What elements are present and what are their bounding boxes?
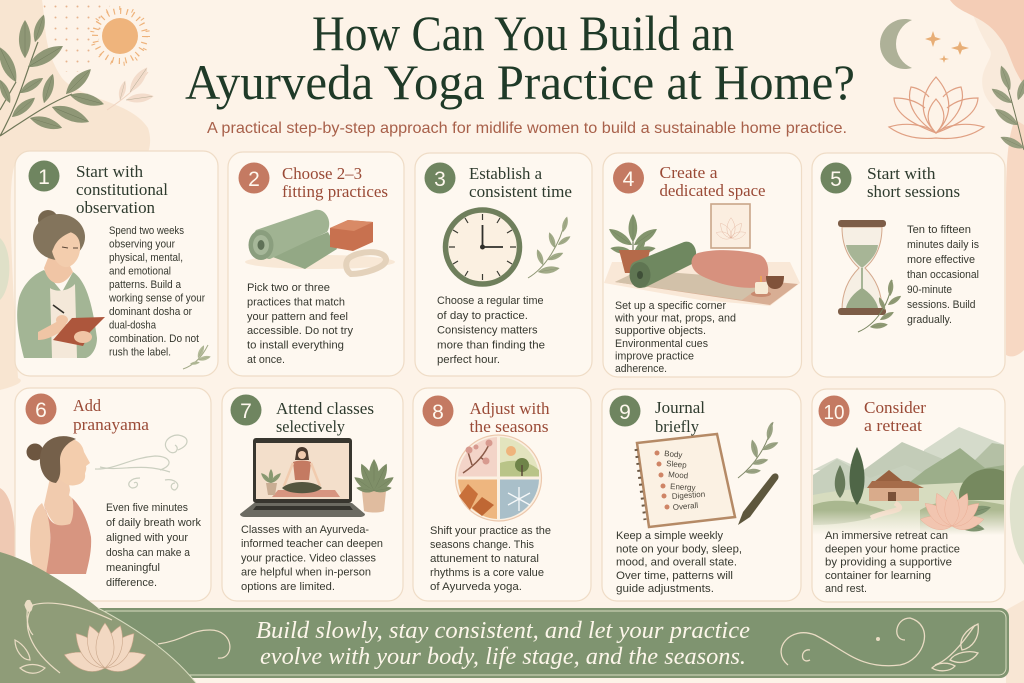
text 1: rush the label. xyxy=(109,346,171,358)
heading 8: Adjust with xyxy=(470,399,550,418)
panel: step 9 xyxy=(602,389,801,601)
text 8: rhythms is a core value xyxy=(430,567,544,579)
banner text xyxy=(256,618,750,670)
number badge 10 xyxy=(818,396,850,426)
text 8: seasons change. This xyxy=(430,539,534,551)
text 1: combination. Do not xyxy=(109,333,199,345)
illustration: journal notebook: Digestion xyxy=(672,490,705,501)
heading 3: Establish a xyxy=(469,164,543,183)
text 5: more effective xyxy=(907,254,975,266)
text 3: of day to practice. xyxy=(437,310,528,322)
icon: dotted halo xyxy=(42,0,112,72)
number badge 9 xyxy=(610,396,640,426)
number badge 2: 2 xyxy=(248,168,260,191)
heading 10: Consider xyxy=(864,398,927,417)
panel: step 2 xyxy=(228,152,404,376)
heading 9 xyxy=(655,398,705,436)
text 1: physical, mental, xyxy=(109,252,183,264)
heading 5: short sessions xyxy=(867,182,960,201)
number badge 1 xyxy=(28,160,60,192)
title xyxy=(185,5,855,110)
text 1: dual-dosha xyxy=(109,320,157,332)
icon: sprig xyxy=(858,279,902,332)
text 1 xyxy=(108,225,205,358)
text 5: gradually. xyxy=(907,314,952,326)
text 5: 90-minute xyxy=(907,284,952,296)
text 6: difference. xyxy=(106,577,157,589)
illustration: journal notebook: Mood xyxy=(668,470,688,480)
panel: step 1 xyxy=(15,151,218,376)
illustration: clock xyxy=(446,210,520,284)
text 3: more than finding the xyxy=(437,339,545,351)
number badge 6: 6 xyxy=(35,399,47,422)
heading 2: Choose 2–3 xyxy=(282,164,362,183)
illustration: laptop class xyxy=(240,438,365,517)
number badge 1: 1 xyxy=(38,166,50,189)
text 3 xyxy=(437,295,545,366)
text 5: than occasional xyxy=(907,269,979,281)
heading 9: briefly xyxy=(655,417,700,436)
text 7 xyxy=(241,524,383,593)
text 6: aligned with your xyxy=(106,532,188,544)
text 4: Environmental cues xyxy=(615,338,708,350)
illustration: practice corner xyxy=(604,204,800,306)
heading 6: pranayama xyxy=(73,415,150,434)
heading 1: Start with xyxy=(76,162,144,181)
text 9: Keep a simple weekly xyxy=(616,530,723,542)
text 5 xyxy=(907,224,979,326)
text 2 xyxy=(247,282,354,366)
icon: breath swirl xyxy=(95,435,187,490)
icon: small sprig xyxy=(183,344,211,369)
heading 7: Attend classes xyxy=(276,399,374,418)
heading 5 xyxy=(867,164,960,201)
closing banner xyxy=(0,552,1009,683)
panel: step 8 xyxy=(413,388,591,601)
text 2: your pattern and feel xyxy=(247,311,348,323)
text 1: Spend two weeks xyxy=(109,225,184,237)
heading 3 xyxy=(469,164,572,201)
heading 2 xyxy=(282,164,388,201)
text 9: guide adjustments. xyxy=(616,583,714,595)
illustration: woman breathing xyxy=(26,436,91,574)
icon: banner lotus xyxy=(62,623,148,676)
text 8: Shift your practice as the xyxy=(430,525,551,537)
number badge 8: 8 xyxy=(432,401,444,424)
icon: potted plant xyxy=(352,459,396,512)
panel: step 5 xyxy=(812,153,1005,377)
text 5: sessions. Build xyxy=(907,299,976,311)
text 6: dosha can make a xyxy=(106,547,191,559)
illustration: journal notebook: Energy xyxy=(670,482,696,492)
number badge 7: 7 xyxy=(240,400,252,423)
number badge 8 xyxy=(422,396,454,426)
text 9 xyxy=(616,530,742,595)
icon: olive branch top right xyxy=(989,64,1024,152)
text 1: and emotional xyxy=(109,266,171,278)
heading 4: dedicated space xyxy=(660,181,766,200)
text 4: with your mat, props, and xyxy=(614,313,736,325)
heading 10 xyxy=(864,398,927,435)
text 1: working sense of your xyxy=(108,292,205,304)
number badge 6 xyxy=(26,394,56,424)
text 6: of daily breath work xyxy=(106,517,201,529)
text 10: by providing a supportive xyxy=(825,557,952,569)
text 1: patterns. Build a xyxy=(109,279,182,291)
text 3: Consistency matters xyxy=(437,325,538,337)
text 6: meaningful xyxy=(106,562,160,574)
text 10: and rest. xyxy=(825,583,867,595)
heading 5: Start with xyxy=(867,164,936,183)
icon: stars xyxy=(925,31,969,63)
heading 7: selectively xyxy=(276,417,346,436)
illustration: mat, block and strap xyxy=(245,210,395,274)
text 7: your practice. Video classes xyxy=(241,552,376,564)
number badge 5: 5 xyxy=(830,168,842,191)
number badge 5 xyxy=(820,162,852,194)
illustration: journal notebook: Body xyxy=(664,449,683,460)
text 2: practices that match xyxy=(247,296,345,308)
icon: framed lotus xyxy=(711,204,750,248)
banner text: Build slowly, stay consistent, and let your practice xyxy=(256,618,750,644)
heading 10: a retreat xyxy=(864,416,922,435)
text 1: observing your xyxy=(109,238,175,250)
title: How Can You Build an xyxy=(312,5,734,61)
heading 9: Journal xyxy=(655,398,705,417)
text 4: improve practice xyxy=(615,350,694,362)
text 7: options are limited. xyxy=(241,581,335,593)
icon: pink lotus xyxy=(919,490,992,534)
heading 8 xyxy=(470,399,550,436)
number badge 3 xyxy=(424,162,456,194)
icon: sprig and pen xyxy=(738,422,779,525)
panel: step 6 xyxy=(15,388,211,601)
heading 7 xyxy=(276,399,374,436)
decorative vine left xyxy=(15,600,230,673)
text 4: supportive objects. xyxy=(615,325,706,337)
text 3: Choose a regular time xyxy=(437,295,544,307)
text 10 xyxy=(825,530,960,595)
illustration: woman journaling xyxy=(17,210,105,358)
text 9: mood, and overall state. xyxy=(616,557,737,569)
illustration: four seasons wheel xyxy=(456,435,542,521)
text 4: Set up a specific corner xyxy=(615,300,726,312)
text 4 xyxy=(614,300,736,375)
text 10: deepen your home practice xyxy=(825,543,960,555)
text 2: Pick two or three xyxy=(247,282,330,294)
heading 6 xyxy=(73,396,150,434)
text 10: container for learning xyxy=(825,570,931,582)
icon: crescent moon xyxy=(880,19,912,69)
illustration: journal notebook xyxy=(636,434,735,527)
heading 6: Add xyxy=(73,396,102,415)
text 9: Over time, patterns will xyxy=(616,570,733,582)
heading 1: observation xyxy=(76,198,155,217)
icon: faint sprig xyxy=(107,65,154,110)
icon: olive branch top left xyxy=(0,13,105,136)
text 5: minutes daily is xyxy=(907,239,979,251)
subtitle: A practical step-by-step approach for midlife women to build a sustainable home practice. xyxy=(207,120,847,137)
text 3: perfect hour. xyxy=(437,354,500,366)
text 10: An immersive retreat can xyxy=(825,530,948,542)
text 9: note on your body, sleep, xyxy=(616,543,742,555)
text 2: accessible. Do not try xyxy=(247,325,354,337)
icon: outline lotus xyxy=(889,77,984,138)
text 7: are helpful when in-person xyxy=(241,567,371,579)
text 5: Ten to fifteen xyxy=(907,224,971,236)
number badge 2 xyxy=(238,162,270,194)
illustration: journal notebook: Overall xyxy=(672,501,699,512)
text 6 xyxy=(106,502,201,589)
heading 3: consistent time xyxy=(469,182,572,201)
number badge 3: 3 xyxy=(434,168,446,191)
text 2: at once. xyxy=(247,354,285,366)
panel: step 4 xyxy=(603,153,802,377)
illustration: mountain retreat xyxy=(813,427,1005,535)
heading 4 xyxy=(660,163,766,200)
number badge 9: 9 xyxy=(619,401,631,424)
heading 8: the seasons xyxy=(470,417,548,436)
icon: sprig xyxy=(528,216,572,278)
text 7: Classes with an Ayurveda- xyxy=(241,524,369,536)
illustration: hourglass xyxy=(838,220,886,315)
text 8: attunement to natural xyxy=(430,553,539,565)
number badge 4: 4 xyxy=(623,168,635,191)
decorative swirl right xyxy=(781,618,978,671)
heading 1 xyxy=(76,162,168,217)
panel: step 10 xyxy=(812,389,1005,602)
heading 4: Create a xyxy=(660,163,718,182)
green corner blob xyxy=(0,552,196,683)
text 8: of Ayurveda yoga. xyxy=(430,581,522,593)
illustration: journal notebook: Sleep xyxy=(666,459,688,470)
heading 2: fitting practices xyxy=(282,182,388,201)
text 8 xyxy=(430,525,551,593)
text 4: adherence. xyxy=(615,363,667,375)
heading 1: constitutional xyxy=(76,180,168,199)
number badge 4 xyxy=(613,162,644,194)
text 6: Even five minutes xyxy=(106,502,188,514)
text 7: informed teacher can deepen xyxy=(241,538,383,550)
text 1: dominant dosha or xyxy=(109,306,192,318)
panel: step 3 xyxy=(415,153,592,376)
icon: sun xyxy=(92,8,148,64)
title: Ayurveda Yoga Practice at Home? xyxy=(185,54,855,110)
panel: step 7 xyxy=(222,388,403,601)
banner text: evolve with your body, life stage, and the seasons. xyxy=(260,644,746,670)
text 2: to install everything xyxy=(247,340,344,352)
number badge 10: 10 xyxy=(824,402,844,424)
number badge 7 xyxy=(230,394,262,426)
